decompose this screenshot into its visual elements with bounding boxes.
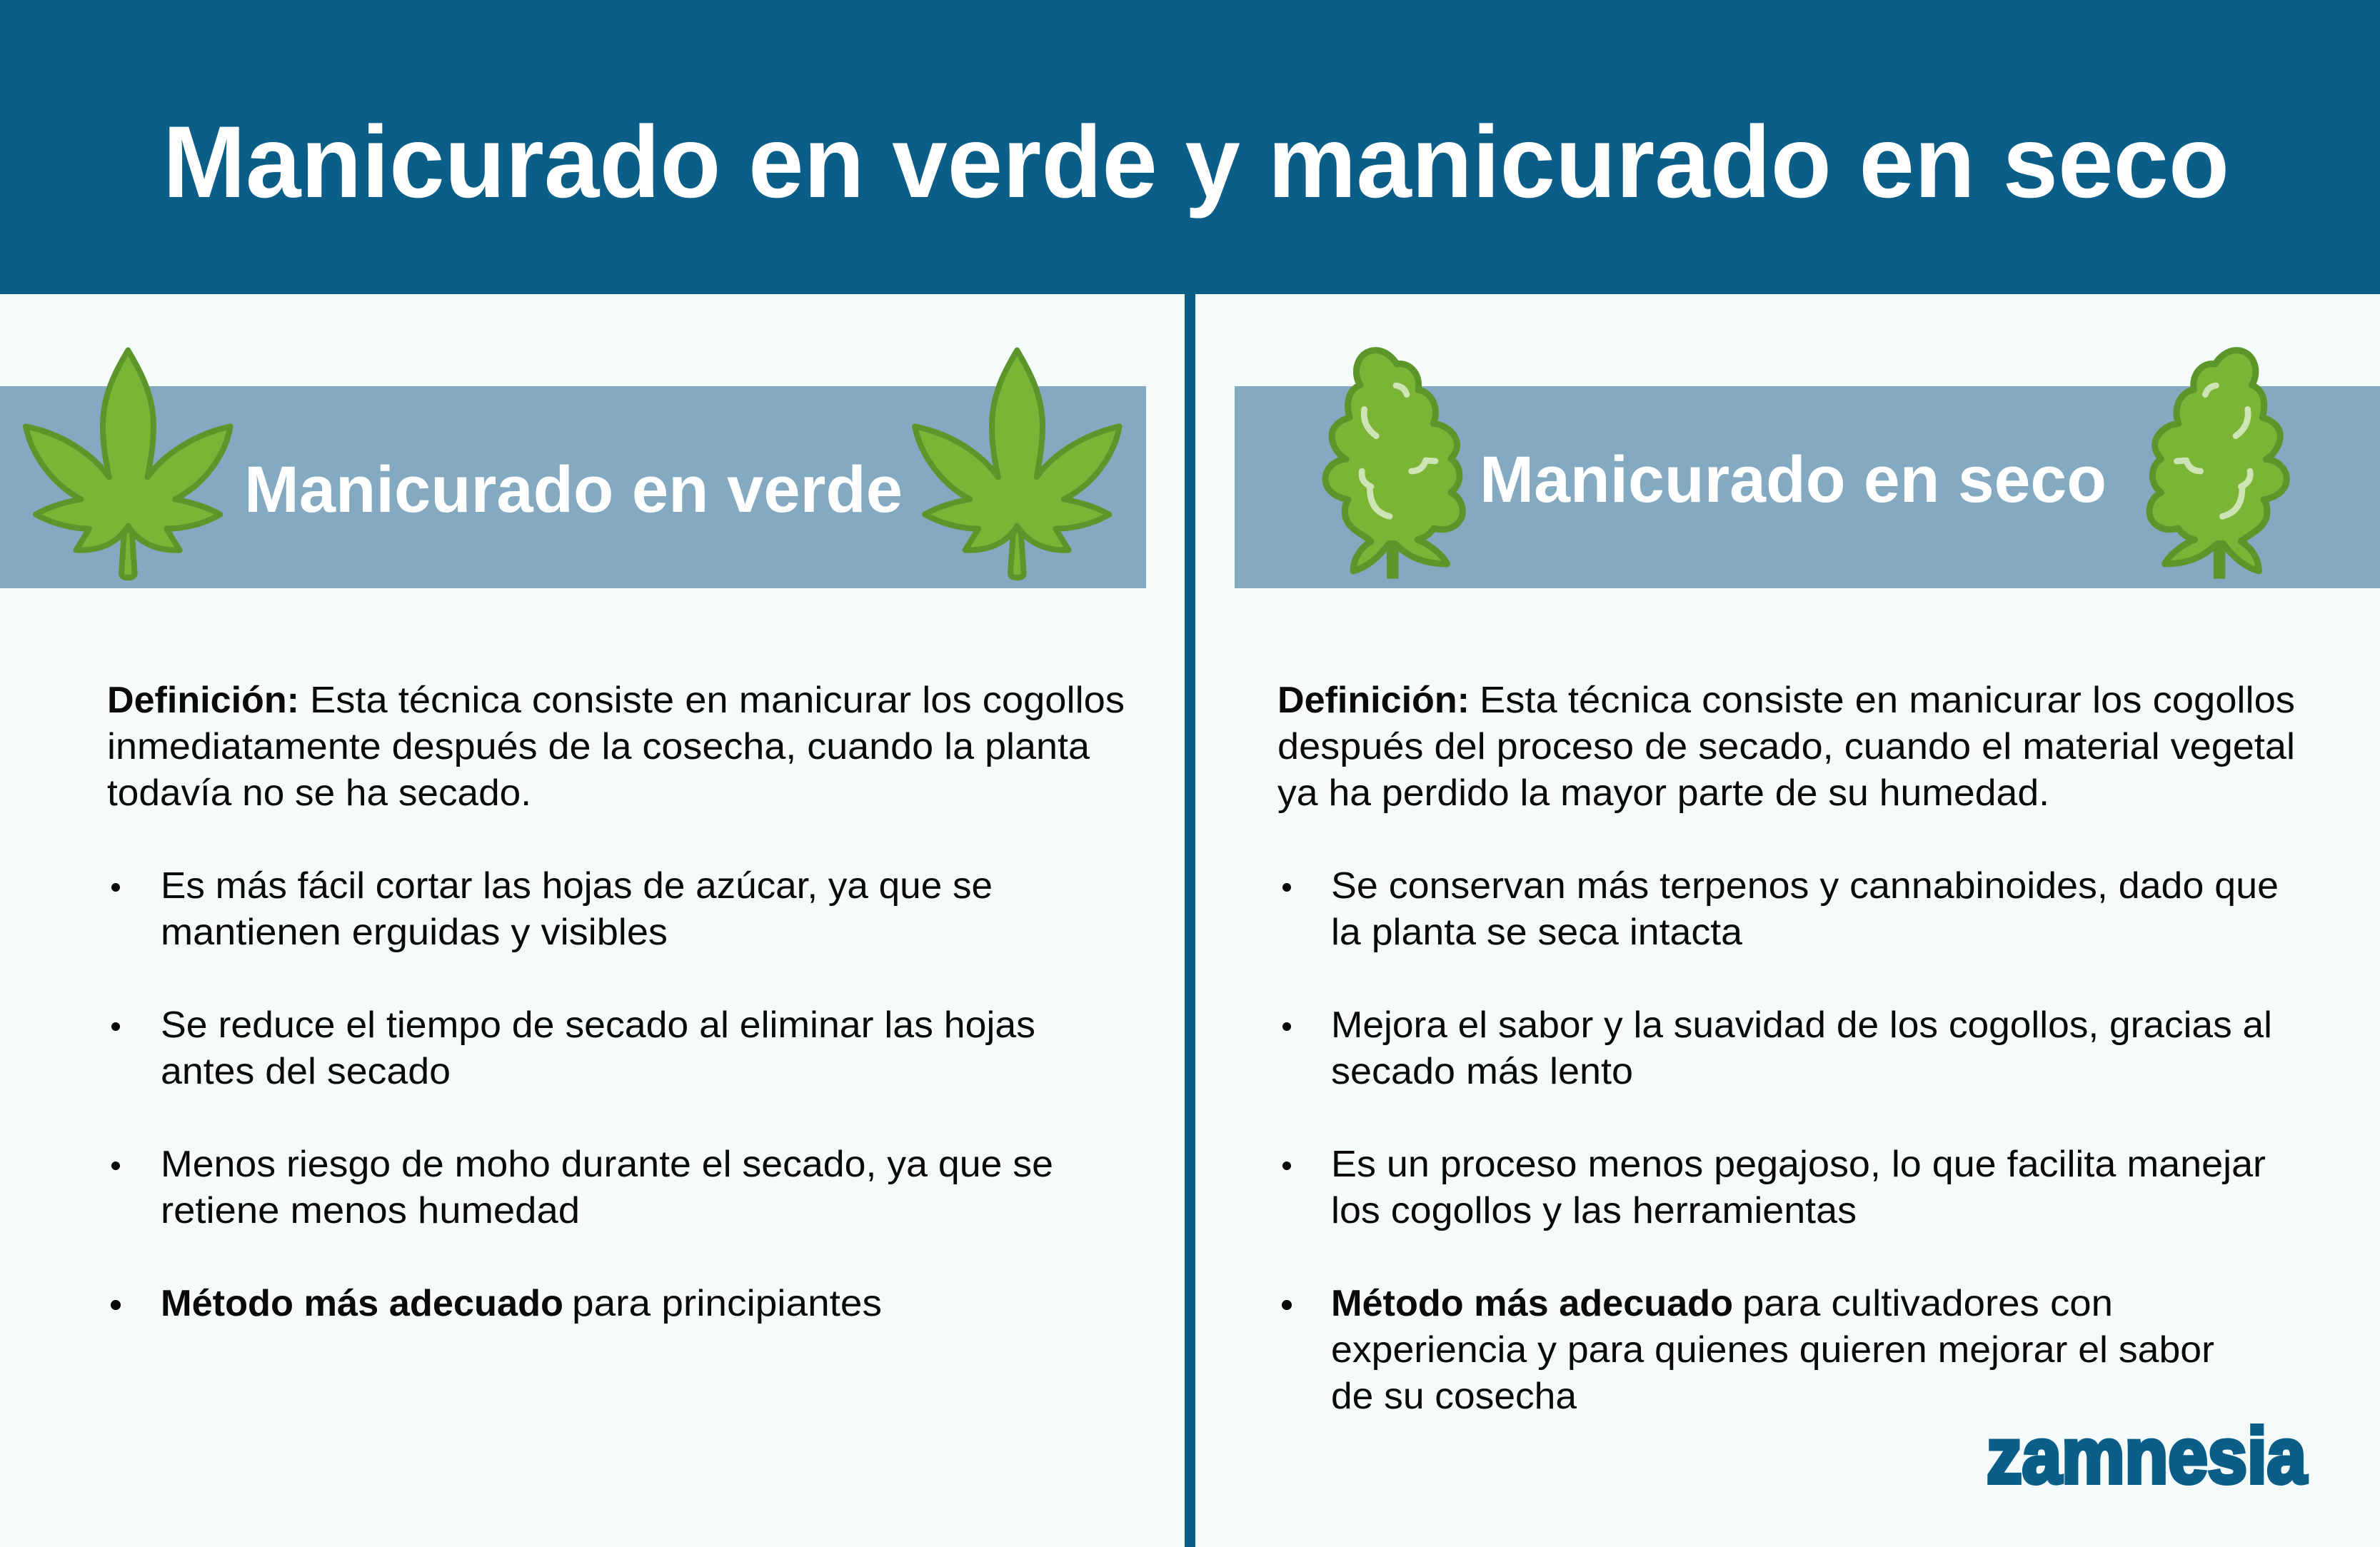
bullet 1: verde [111, 865, 993, 953]
bullet 3: seco [1282, 1144, 2266, 1231]
bullet 1: seco [1282, 865, 2279, 953]
icon: left cannabis leaf [26, 351, 231, 578]
bullet 2: verde [111, 1004, 1035, 1092]
bullet 2: verde: antes del secado [161, 1051, 451, 1092]
bullet 3: seco: los cogollos y las herramientas [1331, 1190, 1857, 1231]
heading: verde: Manicurado en verde [244, 453, 903, 526]
bullet 4: verde: Método más adecuado [161, 1283, 563, 1324]
panel: manicurado en verde [0, 351, 1146, 1324]
definition: seco: ya ha perdido la mayor parte de su humedad. [1277, 772, 2049, 814]
heading band: verde [0, 386, 1146, 588]
definition: verde: inmediatamente después de la cosecha, cuando la planta [107, 726, 1090, 767]
definition: verde: Definición: [107, 680, 299, 721]
definition: verde: todavía no se ha secado. [107, 772, 531, 814]
bullet 4: verde [111, 1283, 882, 1324]
bullet 3: seco: Es un proceso menos pegajoso, lo que facilita manejar [1331, 1144, 2266, 1185]
definition: seco: después del proceso de secado, cuando el material vegetal [1277, 726, 2295, 767]
bullet 2: seco: secado más lento [1331, 1051, 1633, 1092]
logo: zamnesia: zamnesia [1987, 1412, 2307, 1500]
bullet 2: seco [1282, 1004, 2272, 1092]
definition: verde: Esta técnica consiste en manicurar los cogollos [310, 680, 1125, 721]
bullet 1: verde: Es más fácil cortar las hojas de azúcar, ya que se [161, 865, 993, 907]
center divider [1185, 294, 1195, 1547]
panel: manicurado en seco [1235, 351, 2380, 1417]
title: Manicurado en verde y manicurado en seco [163, 106, 2229, 219]
icon: right cannabis leaf [915, 351, 1120, 578]
heading band: seco [1235, 386, 2380, 588]
definition: seco: Esta técnica consiste en manicurar los cogollos [1480, 680, 2295, 721]
bullet 1: verde: mantienen erguidas y visibles [161, 912, 668, 953]
bullet 3: verde [111, 1144, 1053, 1231]
bullet 4: seco: para cultivadores con [1742, 1283, 2113, 1324]
bullet 4: seco: de su cosecha [1331, 1376, 1577, 1417]
bullet 1: seco: la planta se seca intacta [1331, 912, 1742, 953]
definition: verde [107, 680, 1125, 814]
heading: seco: Manicurado en seco [1480, 443, 2107, 516]
header banner [0, 0, 2380, 294]
bullet 1: seco: Se conservan más terpenos y cannabinoides, dado que [1331, 865, 2279, 907]
definition: seco: Definición: [1277, 680, 1470, 721]
bullet 4: seco [1282, 1283, 2214, 1417]
bullet 4: seco: experiencia y para quienes quieren mejorar el sabor [1331, 1329, 2214, 1371]
bullet 3: verde: retiene menos humedad [161, 1190, 580, 1231]
icon: right cannabis bud [2149, 351, 2286, 579]
definition: seco [1277, 680, 2295, 814]
bullet 3: verde: Menos riesgo de moho durante el secado, ya que se [161, 1144, 1053, 1185]
icon: left cannabis bud [1325, 351, 1462, 579]
bullet 4: seco: Método más adecuado [1331, 1283, 1733, 1324]
bullet 4: verde: para principiantes [572, 1283, 882, 1324]
bullet 2: seco: Mejora el sabor y la suavidad de los cogollos, gracias al [1331, 1004, 2272, 1046]
bullet 2: verde: Se reduce el tiempo de secado al eliminar las hojas [161, 1004, 1035, 1046]
